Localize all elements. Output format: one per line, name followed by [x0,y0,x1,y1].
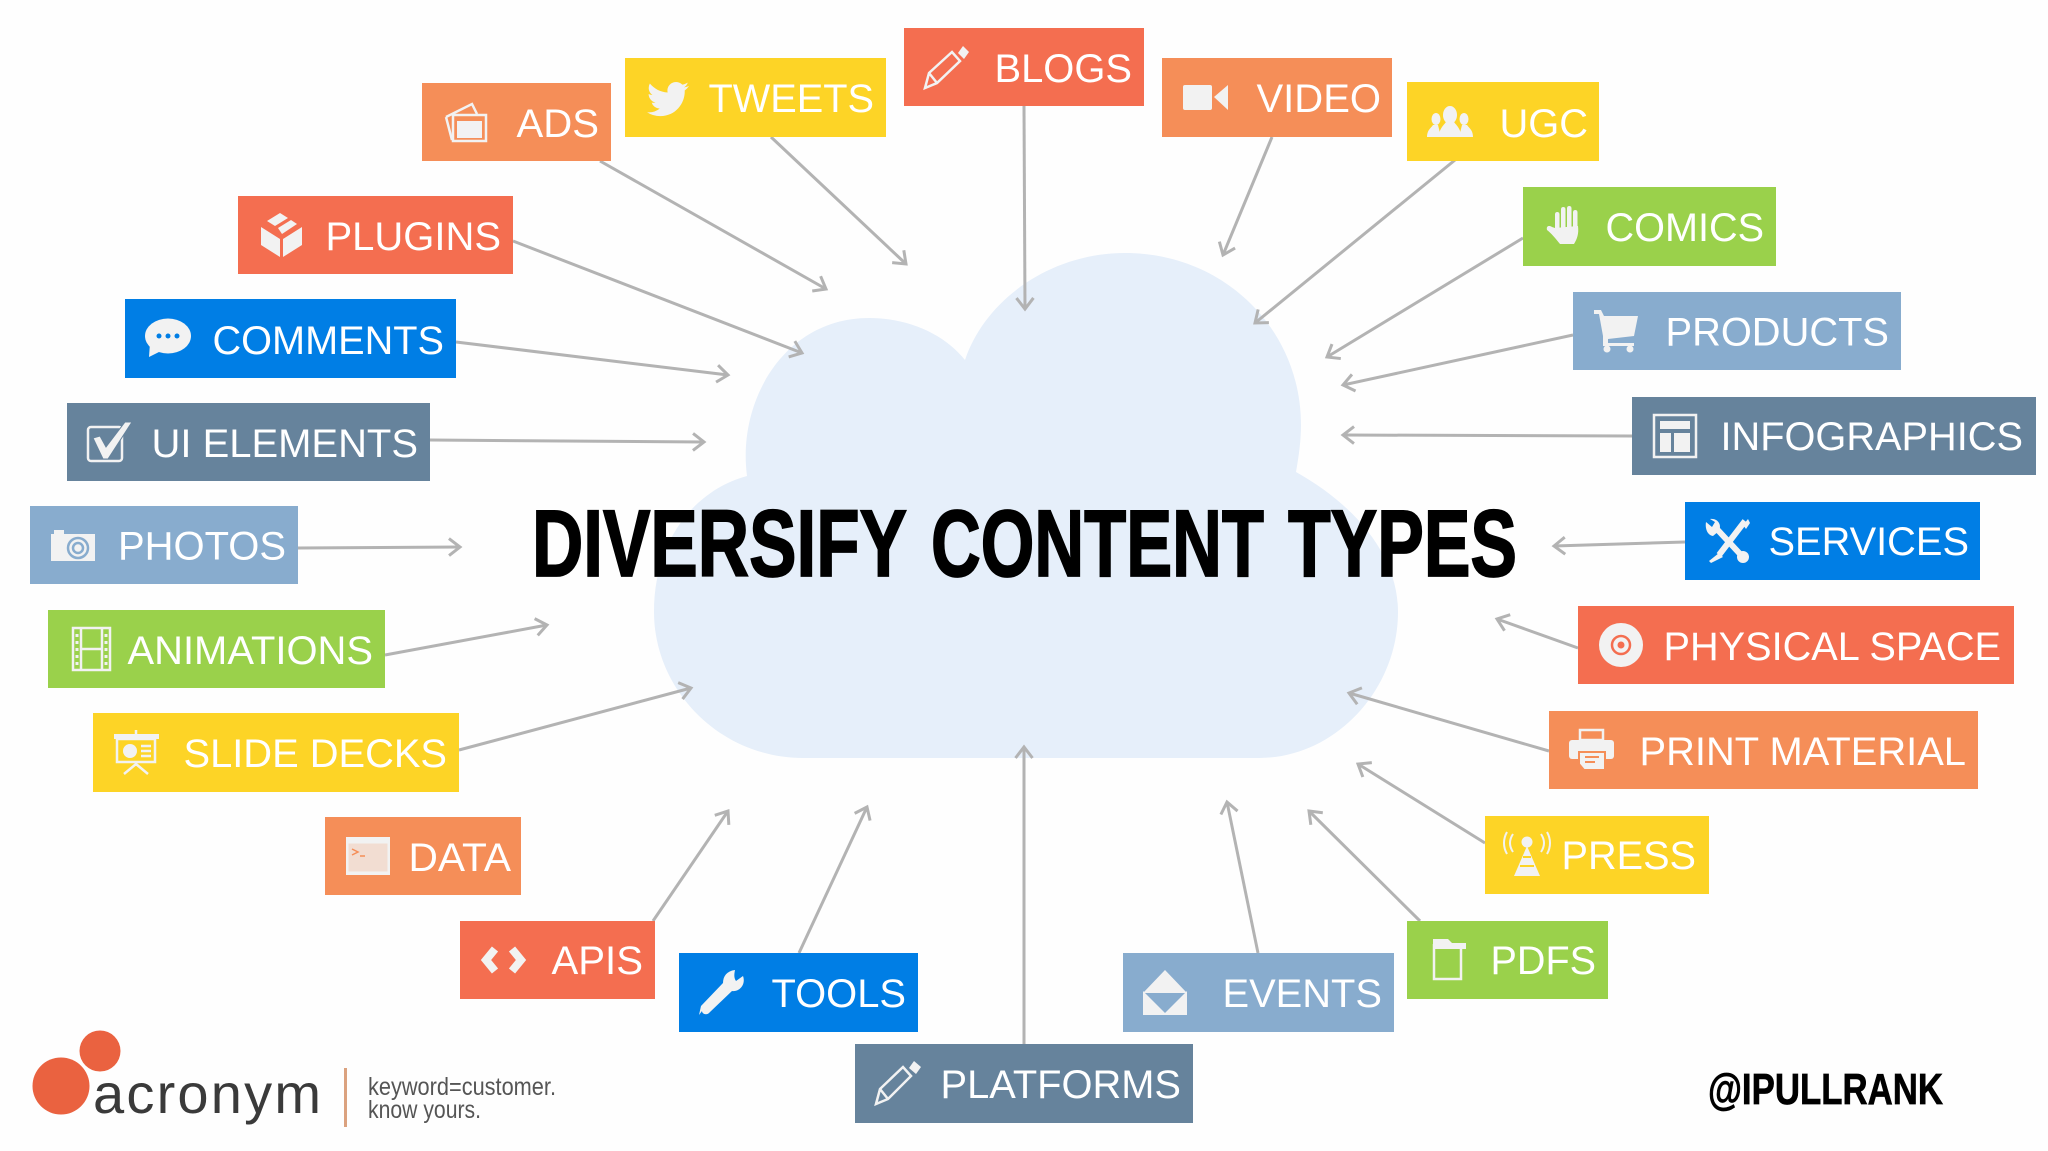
label: physical space [1578,606,2014,684]
icon: printer [1569,730,1614,770]
label: slide decks [93,713,459,792]
title: TYPES [1288,491,1517,597]
icon: tools crossed [1706,519,1750,563]
text: PLUGINS [326,215,501,259]
text: UGC [1500,102,1588,146]
label: photos [30,506,298,584]
icon: document [1433,939,1466,979]
arrow: print material [1349,693,1549,751]
arrow: photos [298,547,460,548]
arrow: press [1358,764,1485,843]
text: BLOGS [994,47,1132,91]
arrow: slide decks [459,688,691,750]
tagline [368,1073,556,1124]
arrow: infographics [1343,435,1632,436]
icon: box [261,213,302,257]
arrow: video [1223,137,1272,255]
label: apis [460,921,655,999]
arrow: ui elements [430,440,704,442]
label: ugc [1407,82,1599,161]
text: PDFS [1490,939,1596,983]
label: services [1685,502,1980,580]
handle: @ipullrank: @IPULLRANK [1708,1065,1943,1114]
icon: wrench [699,970,744,1015]
arrow: services [1554,542,1685,546]
text: UI ELEMENTS [152,422,418,466]
arrow: events [1227,802,1258,953]
icon: presentation board [114,730,159,774]
text: APIS [552,939,643,983]
icon: shopping cart [1594,310,1638,352]
label: plugins [238,196,513,274]
icon: layout [1654,415,1696,457]
title [532,491,1517,597]
tagline: know yours. [368,1096,481,1124]
label: print material [1549,711,1978,789]
text: PRODUCTS [1666,310,1889,354]
arrow: platforms [1022,747,1026,1044]
label: animations [48,610,385,688]
text: ADS [516,102,599,146]
title: CONTENT [931,491,1264,597]
label: press [1485,816,1709,894]
arrow: tweets [771,137,906,264]
icon: twitter bird [647,82,689,116]
arrow: ads [600,161,826,289]
icon: radio tower [1504,832,1550,876]
text: TWEETS [708,77,874,121]
title: DIVERSIFY [532,491,907,597]
label: data [325,817,521,895]
icon: envelope [1143,970,1187,1015]
label: platforms [855,1044,1193,1123]
text: SERVICES [1768,520,1969,564]
label: video [1162,58,1392,137]
icon: checkbox [88,422,132,461]
arrow: pdfs [1309,811,1420,921]
text: EVENTS [1222,972,1382,1016]
icon: pencil [925,46,969,88]
text: COMMENTS [212,319,444,363]
icon: code brackets [486,949,521,971]
icon: pencil [876,1061,921,1104]
text: TOOLS [772,972,906,1016]
text: PRESS [1562,834,1696,878]
text: DATA [408,836,511,880]
cloud [654,253,1398,758]
text: PRINT MATERIAL [1640,730,1966,774]
arrow: comments [456,342,728,375]
icon: camera [51,530,95,561]
arrow: comics [1327,238,1523,357]
text: SLIDE DECKS [184,732,447,776]
tagline: keyword=customer. [368,1073,556,1101]
label: blogs [904,28,1144,106]
label: tools [679,953,918,1032]
arrow: physical space [1497,619,1578,648]
label: tweets [625,58,886,137]
icon: target disc [1599,623,1643,667]
label: events [1123,953,1394,1032]
text: ANIMATIONS [128,629,373,673]
label: products [1573,292,1901,370]
icon: people [1427,106,1473,137]
label: pdfs [1407,921,1608,999]
arrow: ugc [1255,160,1455,323]
icon: ads [446,104,486,141]
text: PHYSICAL SPACE [1664,625,2001,669]
text: INFOGRAPHICS [1720,415,2023,459]
text: PHOTOS [118,524,286,568]
logo: acronym [32,1030,556,1127]
logo divider [344,1068,347,1127]
text: VIDEO [1256,77,1381,121]
icon: video camera [1183,85,1228,110]
label: ui elements [67,403,430,481]
arrow: products [1343,335,1573,385]
arrow: blogs [1024,106,1025,309]
logo wordmark: acronym [93,1062,321,1125]
icon: film strip [73,628,110,670]
icon: hand [1547,206,1578,244]
label: infographics [1632,397,2036,475]
label: comments [125,299,456,378]
logo circles [32,1030,120,1114]
label: ads [422,83,611,161]
arrow: plugins [513,241,802,353]
arrow: apis [653,811,728,921]
arrow: tools [799,807,867,953]
text: COMICS [1606,206,1764,250]
text: PLATFORMS [940,1063,1181,1107]
icon: speech bubble [145,318,191,357]
icon: terminal window [346,837,390,875]
arrow: animations [385,625,547,655]
label: comics [1523,187,1776,266]
